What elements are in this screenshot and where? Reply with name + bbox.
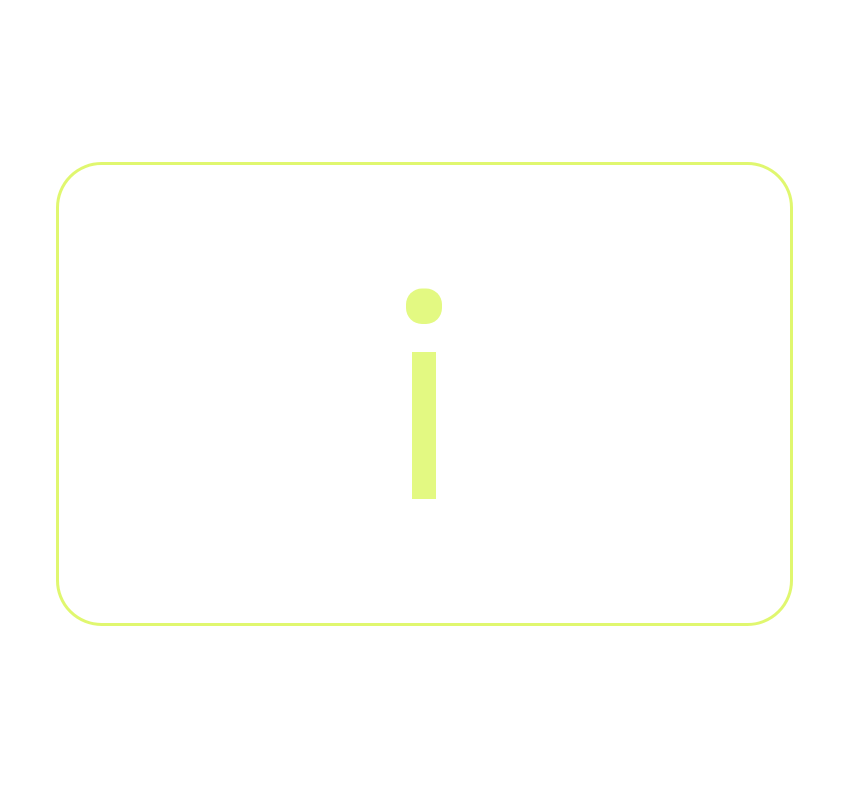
icon: dot of the i bbox=[406, 288, 442, 324]
panel: rounded outline frame bbox=[58, 164, 792, 624]
icon: information letter i bbox=[406, 288, 442, 499]
icon: stem of the i bbox=[412, 352, 436, 499]
